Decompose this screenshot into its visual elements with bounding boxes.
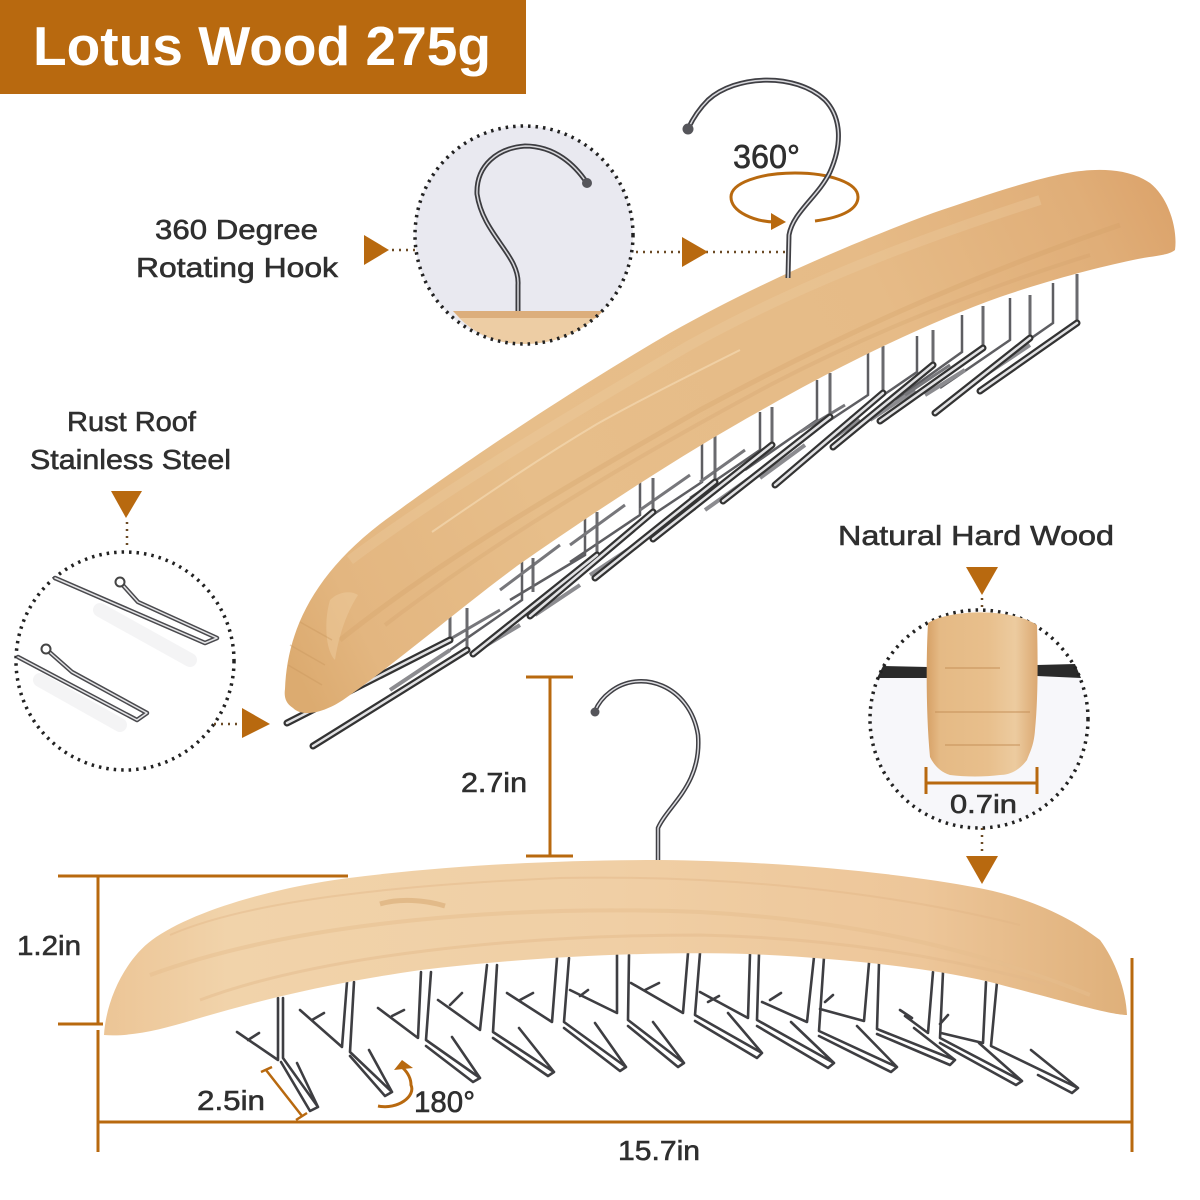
dimension: thickness 1.2in (17, 876, 348, 1024)
dimension: clip length 2.5in (197, 1067, 307, 1120)
detail circle: hook (415, 126, 633, 344)
arrow: detail circle to hook (636, 237, 786, 267)
dimension: width 15.7in (98, 958, 1132, 1166)
arrow: hook label to detail circle (364, 235, 416, 265)
rotation ring: 360 degrees (731, 138, 858, 230)
rotation arrow: 180 degrees (378, 1060, 475, 1119)
hook: bottom hanger (590, 681, 698, 860)
dimension: width 15.7in: 15.7in (618, 1135, 700, 1166)
wood body: bottom hanger (104, 860, 1127, 1035)
wood grain: bottom hanger (150, 878, 1090, 1000)
label: rotating hook: 360 Degree (155, 214, 318, 245)
arrow: steel circle to hanger (214, 708, 270, 738)
detail circle: wood cross-section: 0.7in (950, 789, 1017, 819)
wood body: top hanger (285, 170, 1176, 713)
label: stainless steel: Rust Roof (67, 406, 196, 437)
title banner (0, 0, 526, 94)
detail circle: wood cross-section (870, 610, 1088, 828)
wood grain: top hanger (288, 200, 1120, 685)
label: rotating hook: Rotating Hook (136, 252, 339, 283)
dimension: thickness 1.2in: 1.2in (17, 930, 81, 961)
hanger clips: top hanger (287, 274, 1077, 746)
arrow: wood circle to hanger (966, 828, 998, 884)
top hanger (285, 80, 1176, 746)
arrow: steel label to detail circle (111, 491, 142, 550)
dimension: hook height 2.7in (461, 677, 573, 856)
dimension: hook height 2.7in: 2.7in (461, 767, 527, 798)
arrow: wood label to detail circle (966, 567, 998, 610)
hook: top hanger (682, 80, 838, 278)
label: stainless steel (30, 406, 231, 475)
rotation arrow: 180 degrees: 180° (414, 1086, 475, 1119)
dimension: clip length 2.5in: 2.5in (197, 1085, 265, 1116)
title banner: Lotus Wood 275g (33, 15, 491, 77)
rotation ring: 360 degrees: 360° (733, 138, 800, 175)
label: rotating hook (136, 214, 339, 283)
bottom hanger (104, 681, 1127, 1111)
label: stainless steel: Stainless Steel (30, 444, 231, 475)
label: natural hard wood: Natural Hard Wood (838, 520, 1114, 551)
hanger clips: bottom hanger (237, 953, 1078, 1111)
detail circle: steel (16, 552, 234, 770)
